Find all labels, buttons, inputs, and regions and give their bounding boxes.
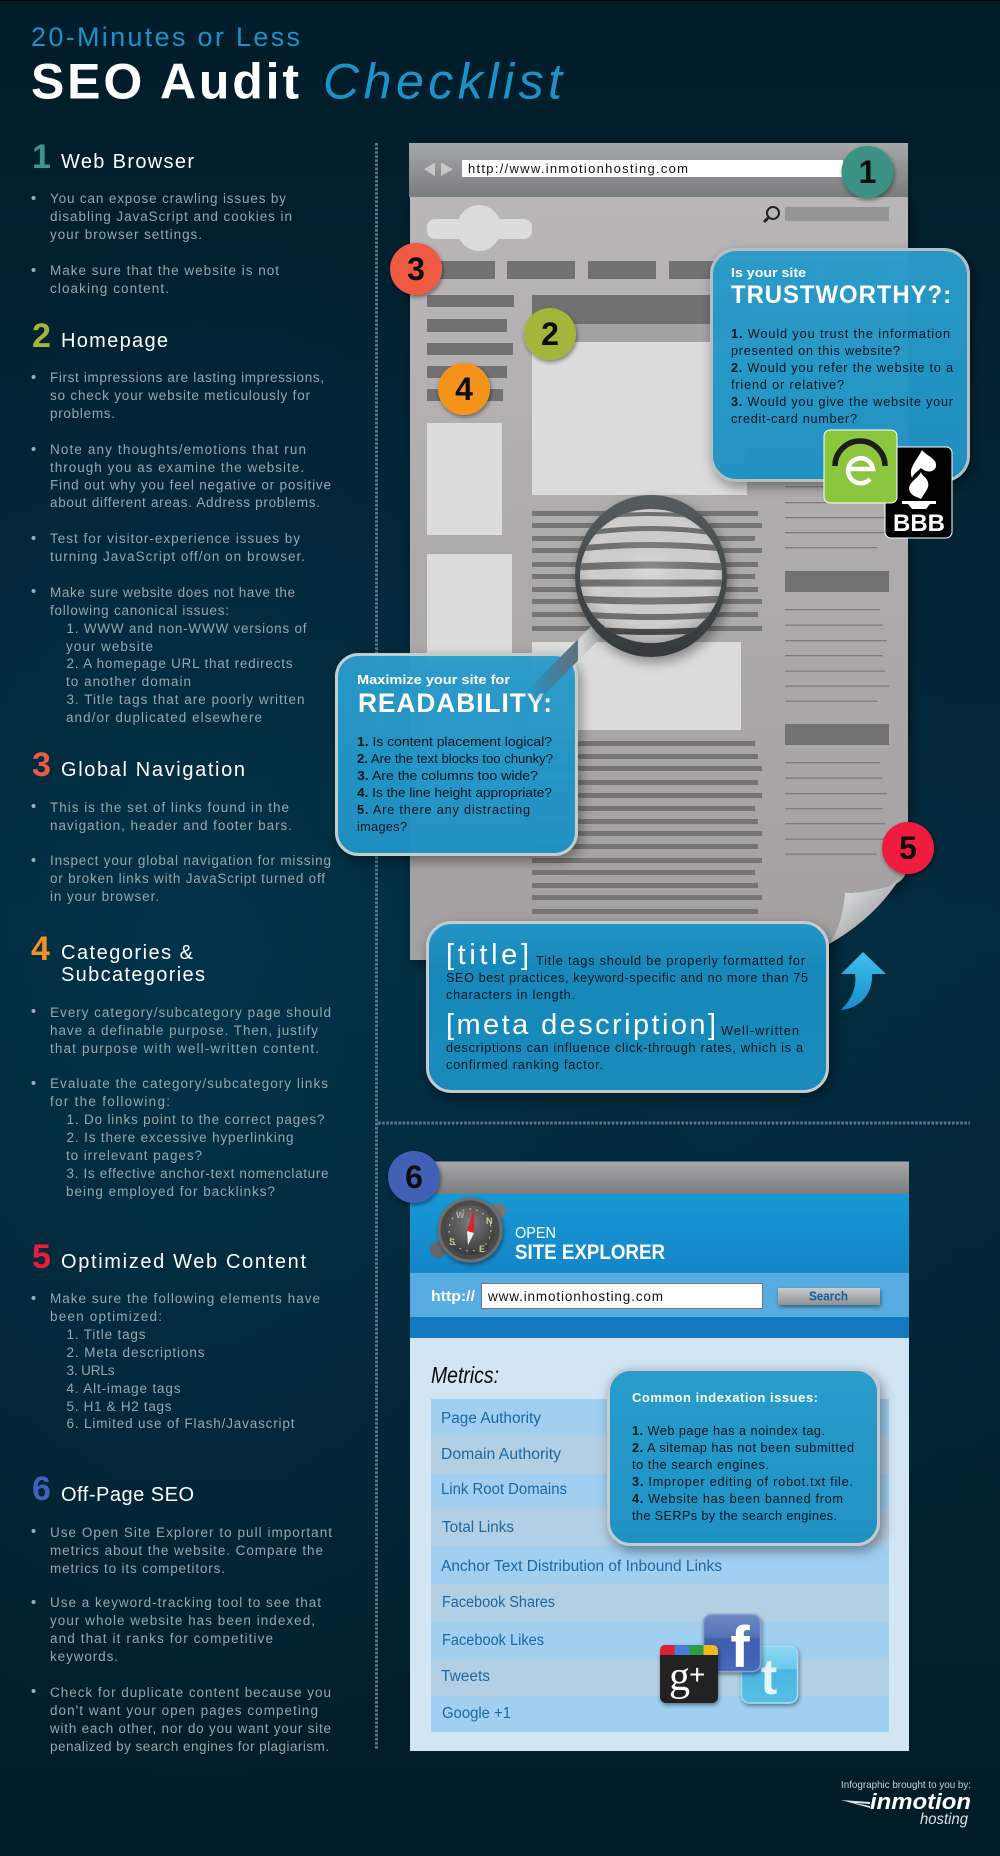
marker 5: 5 [899,830,917,866]
heading 4: 4 [31,930,50,968]
callout questions: 3. Are the columns too wide? [357,769,538,783]
numbered markers [390,146,934,874]
icon: compass: E [479,1244,485,1254]
marker 4 [438,363,490,415]
heading 1: Web Browser [61,151,194,173]
heading 6: 6 [32,1470,51,1508]
marker 3 [390,243,442,295]
logo: inmotion hosting: hosting [920,1811,968,1828]
title accent word: Checklist [323,54,564,110]
meta description text [446,1009,804,1072]
body text 2: so check your website meticulously for [50,388,310,403]
address bar [462,160,843,177]
search button [778,1288,880,1305]
main header block [532,295,748,342]
body text 4: that purpose with well-written content. [50,1041,319,1056]
icon: compass: N [486,1216,492,1226]
body text 4 [32,1005,331,1199]
logo: inmotion hosting [841,1789,971,1828]
body text 6: Use Open Site Explorer to pull important [50,1525,332,1540]
marker 1: 1 [859,154,876,190]
title tag text: SEO best practices, keyword-specific and no more than 75 [446,971,808,985]
search band [410,1273,909,1317]
navigation bars [427,261,889,279]
body text 2: Test for visitor-experience issues by [50,531,300,546]
body text 5: 5. H1 & H2 tags [66,1399,172,1414]
body text 2: your website [66,639,153,654]
body text 2: to another domain [66,674,191,689]
icon: google plus: g [669,1654,690,1700]
logo wordmark: SITE EXPLORER [515,1241,665,1264]
body text 2: Find out why you feel negative or positive [50,478,331,492]
heading 2: 2 [32,317,51,355]
social icons [660,1614,798,1705]
body text 2: following canonical issues: [50,603,229,618]
browser window mockup [409,143,908,960]
title tag text: characters in length. [446,988,575,1002]
metrics table: Facebook Shares [442,1594,555,1611]
heading 3: Global Navigation [61,759,245,781]
callout heading [357,672,553,718]
body text 2: First impressions are lasting impressions, [50,370,324,385]
body text 6: your whole website has been indexed, [50,1613,315,1628]
heading 2 [32,317,168,355]
body text 2: about different areas. Address problems. [50,495,320,510]
icon: compass: W [456,1210,465,1220]
body text 3: or broken links with JavaScript turned off [50,871,325,886]
marker 6 [388,1151,440,1203]
callout questions: presented on this website? [731,344,900,358]
callout questions [357,735,553,834]
body text 4: being employed for backlinks? [66,1184,275,1199]
callout questions: 3. Would you give the website your [731,395,954,409]
body text 1: your browser settings. [50,227,202,242]
body text 4: Every category/subcategory page should [50,1005,331,1020]
heading 1 [32,138,194,176]
search button: Search [809,1288,848,1304]
icon: magnifying glass [528,495,727,700]
meta description text: Well-written [721,1024,799,1038]
body text 5: been optimized: [50,1309,162,1324]
panel header [410,1194,909,1273]
url input [482,1284,762,1308]
callout questions: friend or relative? [731,378,844,392]
body text 2: and/or duplicated elsewhere [66,710,262,725]
title tag text: [title] [446,939,529,971]
body text 5: 4. Alt-image tags [66,1381,181,1396]
body text 3: in your browser. [50,889,159,904]
metrics table: Domain Authority [441,1446,561,1463]
heading 3 [32,746,245,784]
heading 5: Optimized Web Content [61,1251,306,1273]
metrics table: Google +1 [442,1705,511,1722]
logo wordmark: OPEN [515,1225,556,1242]
open site explorer panel [410,1162,909,1751]
page fold [829,878,900,944]
callout: title and meta description [428,922,828,1092]
heading 5: 5 [32,1238,51,1276]
body text 4: to irrelevant pages? [66,1148,202,1163]
heading 3: 3 [32,746,51,784]
icon: BBB seal [885,447,952,538]
icon: google plus [660,1645,718,1703]
metrics table: Page Authority [441,1410,541,1427]
body text 5: 2. Meta descriptions [66,1345,205,1360]
section 2: Homepage [32,317,331,725]
meta description text: [meta description] [446,1009,716,1041]
subtitle line: 20-Minutes or Less [31,22,300,52]
callout list: 3. Improper editing of robot.txt file. [632,1475,853,1489]
metrics heading: Metrics: [431,1362,499,1388]
icon: BBB seal: BBB [893,510,945,537]
metrics area [410,1338,909,1751]
callout: readability [336,654,576,854]
callout questions: 1. Would you trust the information [731,327,950,341]
heading 4 [31,930,205,986]
body text 2: Make sure website does not have the [50,585,295,600]
icon: compass [430,1199,506,1261]
heading 4: Subcategories [61,964,205,986]
body text 4: 2. Is there excessive hyperlinking [66,1130,294,1145]
title tag text: Title tags should be properly formatted for [536,954,806,968]
metrics table: Total Links [442,1519,514,1536]
title [31,22,564,110]
callout heading: READABILITY: [358,688,553,718]
heading 4: Categories & [61,942,194,964]
footer credit: Infographic brought to you by: [841,1779,971,1791]
main title: SEO Audit [31,54,299,110]
callout heading: TRUSTWORTHY?: [731,281,952,309]
body text 6: with each other, nor do you want your site [49,1721,331,1736]
body text 2: turning JavaScript off/on on browser. [50,549,305,564]
body text 3 [32,800,331,904]
body text 3: navigation, header and footer bars. [50,818,292,833]
section 3: Global Navigation [32,746,331,904]
meta description text: descriptions can influence click-through rates, which is a [446,1041,804,1055]
body text 4: Evaluate the category/subcategory links [50,1076,328,1091]
search icon and box [764,207,889,222]
metrics table: Tweets [441,1668,490,1685]
marker 2 [524,308,576,360]
body text 5 [32,1291,320,1431]
icon: facebook: f [730,1615,750,1680]
body text 6: Use a keyword-tracking tool to see that [50,1595,321,1610]
callout list: 2. A sitemap has not been submitted [632,1441,854,1455]
heading 1: 1 [32,138,51,176]
body text 5: Make sure the following elements have [50,1291,320,1306]
marker 5 [882,822,934,874]
marker 2: 2 [541,316,559,352]
callout list: 1. Web page has a noindex tag. [632,1424,825,1438]
body text 2: problems. [50,406,115,421]
magnifier handle [528,620,608,700]
body text 3: This is the set of links found in the [50,800,289,815]
meta description text: confirmed ranking factor. [446,1058,603,1072]
body text 5: 3. URLs [66,1363,115,1378]
icon: green e logo [824,430,897,503]
section 5: Optimized Web Content [32,1238,320,1431]
icon: compass: S [449,1237,455,1247]
body text 1: You can expose crawling issues by [50,191,286,206]
right column lines [785,486,889,855]
body text 6: keywords. [50,1649,118,1664]
body text 6: don't want your open pages competing [50,1703,318,1718]
callout questions: 2. Would you refer the website to a [731,361,954,375]
section 1: Web Browser [32,138,292,296]
body text 2: 2. A homepage URL that redirects [66,656,293,671]
body text 6: metrics about the website. Compare the [50,1543,323,1558]
search band: http:// [431,1288,476,1305]
body text 3: Inspect your global navigation for missing [50,853,331,868]
body text 4: have a definable purpose. Then, justify [50,1023,318,1038]
metrics table [431,1399,889,1732]
logo wordmark [515,1225,665,1264]
logo: inmotion hosting: inmotion [870,1789,971,1814]
main text lines [532,511,762,914]
body text 1: Make sure that the website is not [50,263,279,278]
body text 4: 1. Do links point to the correct pages? [66,1112,324,1127]
section 4: Categories and Subcategories [31,930,331,1199]
body text 2: Note any thoughts/emotions that run [50,442,306,457]
body text 5: 6. Limited use of Flash/Javascript [66,1416,295,1431]
body text 2: 3. Title tags that are poorly written [66,692,304,707]
callout questions: 2. Are the text blocks too chunky? [357,752,553,766]
magnifier frame [575,495,727,657]
callout: indexation issues [608,1370,878,1544]
callout list: to the search engines. [632,1458,769,1472]
page with curled corner [410,197,908,960]
footer credit [841,1779,971,1828]
body text 6 [32,1525,332,1754]
body text 4: 3. Is effective anchor-text nomenclature [66,1166,328,1181]
body text 5: 1. Title tags [66,1327,146,1342]
body text 4: for the following: [50,1094,170,1109]
callout questions: credit-card number? [731,412,857,426]
metrics table: Link Root Domains [441,1481,567,1498]
icon: twitter: t [761,1649,778,1705]
callout: trustworthy [712,250,968,480]
callout questions: 5. Are there any distracting [357,803,530,817]
body text 1 [32,191,292,296]
callout questions: 4. Is the line height appropriate? [357,786,552,800]
body text 6: penalized by search engines for plagiarism. [50,1739,329,1754]
panel toolbar [410,1162,909,1194]
body text 6: metrics to its competitors. [50,1561,225,1576]
body text 6: and that it ranks for competitive [50,1631,273,1646]
body text 6: Check for duplicate content because you [50,1685,331,1700]
callout heading: Maximize your site for [357,672,510,687]
browser toolbar [409,143,908,197]
callout heading: Common indexation issues: [632,1390,818,1405]
sidebar bars [427,295,514,401]
body text 2: 1. WWW and non-WWW versions of [66,621,307,636]
arrow: curl up [841,952,886,1010]
logo placeholder [427,205,532,251]
address text: http://www.inmotionhosting.com [468,161,688,176]
body text 1: cloaking content. [50,281,169,296]
callout list: 4. Website has been banned from [632,1492,843,1506]
body text 1: disabling JavaScript and cookies in [50,209,292,224]
heading 5 [32,1238,306,1276]
callout questions: images? [357,820,407,834]
heading 6 [32,1470,194,1508]
marker 4: 4 [455,371,473,407]
callout list [632,1424,854,1523]
marker 1 [842,146,894,198]
url input: www.inmotionhosting.com [487,1289,663,1304]
marker 3: 3 [407,251,425,287]
heading 6: Off-Page SEO [61,1484,194,1506]
image placeholders [427,342,747,823]
body text 2 [32,370,331,725]
section 6: Off-Page SEO [32,1470,332,1754]
icon: google plus: + [689,1659,705,1690]
heading 2: Homepage [61,330,168,352]
title tag text [446,939,808,1002]
metrics table: Anchor Text Distribution of Inbound Links [441,1558,722,1575]
callout heading: Is your site [731,265,806,280]
metrics table: Facebook Likes [442,1632,544,1649]
body text 2: through you as examine the website. [50,460,304,475]
callout heading [731,265,952,309]
marker 6: 6 [405,1159,423,1195]
magnifier lens [580,509,722,643]
callout questions: 1. Is content placement logical? [357,735,552,749]
callout questions [731,327,954,426]
callout list: the SERPs by the search engines. [632,1509,837,1523]
